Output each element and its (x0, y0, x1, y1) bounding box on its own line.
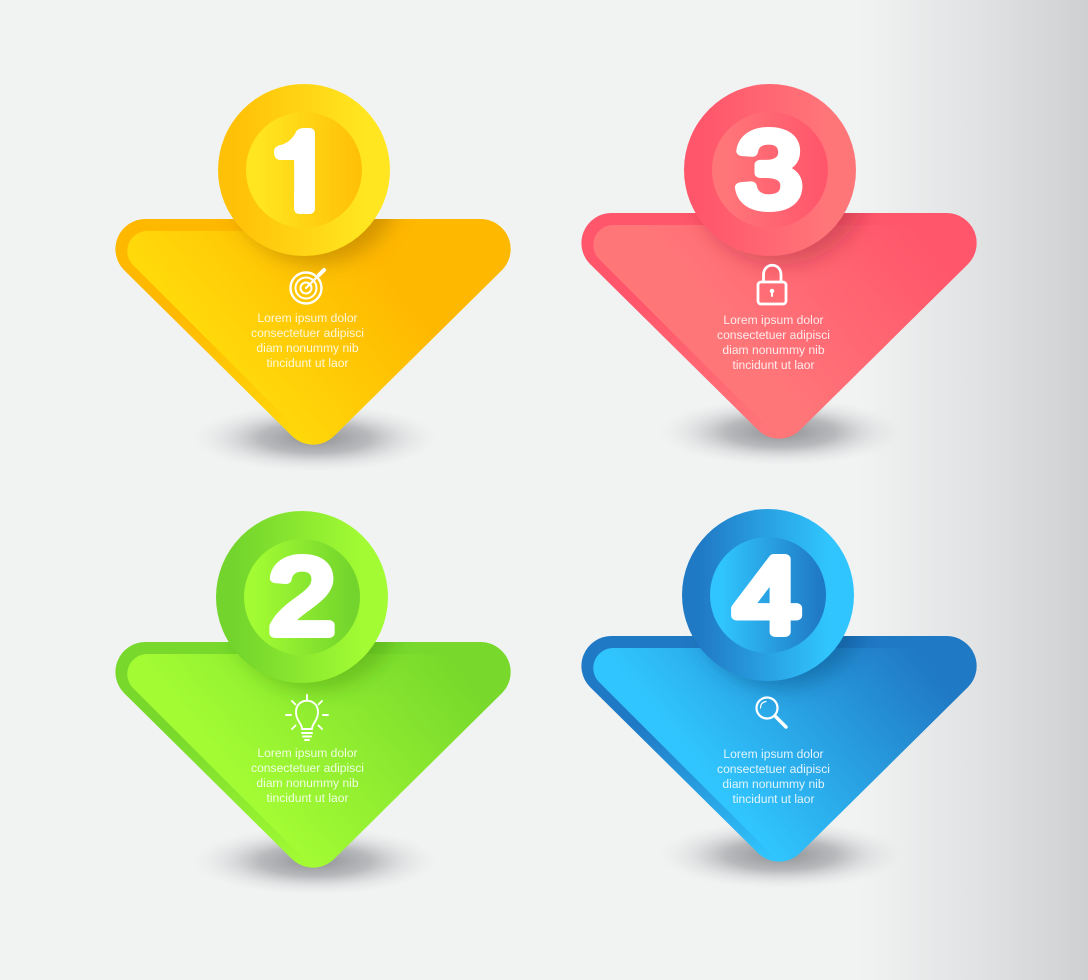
number badge 2 (216, 511, 388, 683)
number badge 3 (684, 84, 856, 256)
panel: step 2 green (110, 511, 520, 895)
text block 2: Lorem ipsum dolor (257, 746, 358, 760)
text block 3: consectetuer adipisci (717, 328, 830, 342)
arrow shape 2 (115, 642, 511, 868)
ground shadow 4 (659, 821, 903, 889)
icon: light bulb (286, 695, 328, 740)
text block 3: diam nonummy nib (722, 343, 825, 357)
text block 1: consectetuer adipisci (251, 326, 364, 340)
number 2: 2 (269, 537, 335, 656)
number badge 4 (682, 509, 854, 681)
text block 1: diam nonummy nib (256, 341, 359, 355)
text block 1: tincidunt ut laor (266, 356, 349, 370)
text block 4: tincidunt ut laor (732, 792, 815, 806)
number 1 (274, 128, 315, 214)
text block 2: consectetuer adipisci (251, 761, 364, 775)
text block 1: Lorem ipsum dolor (257, 311, 358, 325)
text block 3: tincidunt ut laor (732, 358, 815, 372)
arrow shape 3 (581, 213, 977, 439)
number badge 1 (218, 84, 390, 256)
icon: padlock (758, 265, 786, 304)
text block 2: diam nonummy nib (256, 776, 359, 790)
ground shadow 2 (193, 827, 437, 895)
text block 4: diam nonummy nib (722, 777, 825, 791)
arrow shape 1 (115, 219, 511, 445)
ground shadow 1 (193, 404, 437, 472)
ground shadow 3 (659, 398, 903, 466)
icon: target with dart (290, 270, 324, 304)
number 3: 3 (736, 110, 802, 229)
number 4: 4 (734, 536, 800, 655)
icon: magnifier (756, 698, 786, 727)
text block 3: Lorem ipsum dolor (723, 313, 824, 327)
arrow shape 4 (581, 636, 977, 862)
panel: step 4 blue (576, 509, 986, 889)
text block 4: Lorem ipsum dolor (723, 747, 824, 761)
panel: step 3 red (576, 84, 986, 466)
panel: step 1 yellow (110, 84, 520, 472)
text block 4: consectetuer adipisci (717, 762, 830, 776)
number 1: 1 (275, 113, 333, 231)
text block 2: tincidunt ut laor (266, 791, 349, 805)
